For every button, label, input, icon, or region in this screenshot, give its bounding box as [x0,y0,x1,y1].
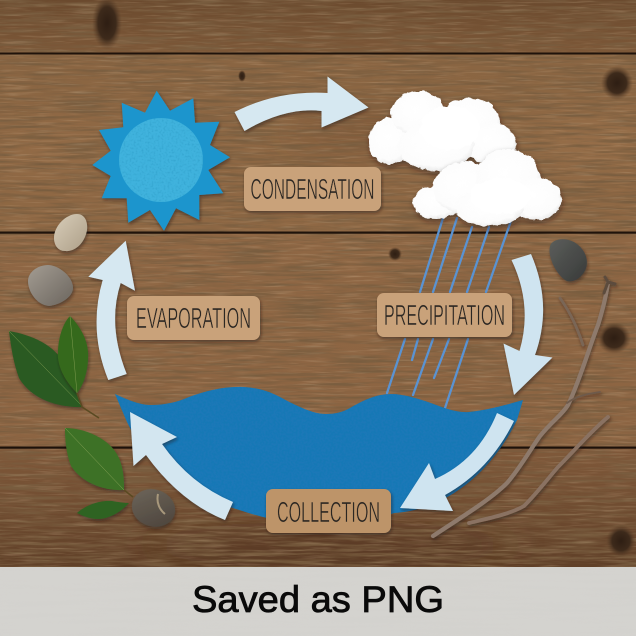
stone: dark grey [549,239,587,281]
stone: dark speckled pebble [127,484,180,532]
label: condensation [244,167,381,211]
leaves: lower sprig [65,428,133,519]
arrow: evaporation to condensation [234,76,368,131]
banner [0,567,636,636]
banner title: Saved as PNG [192,579,444,620]
sun rays [92,91,230,231]
arrow: precipitation to collection [504,254,552,395]
label: precipitation [377,293,512,337]
sun disc [119,118,203,202]
label: collection: COLLECTION [277,497,380,529]
rain strings [387,218,512,408]
cloud: upper cotton cloud [368,91,516,171]
label: collection [266,489,391,533]
stone: beige pebble [54,214,87,251]
arrow: water rising [130,412,233,520]
water: blue fabric lake [115,387,523,527]
icon: felt sun [92,91,230,231]
cloud: lower cotton cloud [413,149,562,226]
label: precipitation: PRECIPITATION [384,300,505,332]
stone: grey pebble [28,265,73,306]
arrow: collection inflow [400,413,514,511]
label: condensation: CONDENSATION [250,174,374,206]
leaves: upper sprig [9,316,99,418]
twigs [433,277,615,536]
arrow: evaporation upward [88,241,135,380]
label: evaporation [127,296,260,340]
label: evaporation: EVAPORATION [136,303,251,335]
